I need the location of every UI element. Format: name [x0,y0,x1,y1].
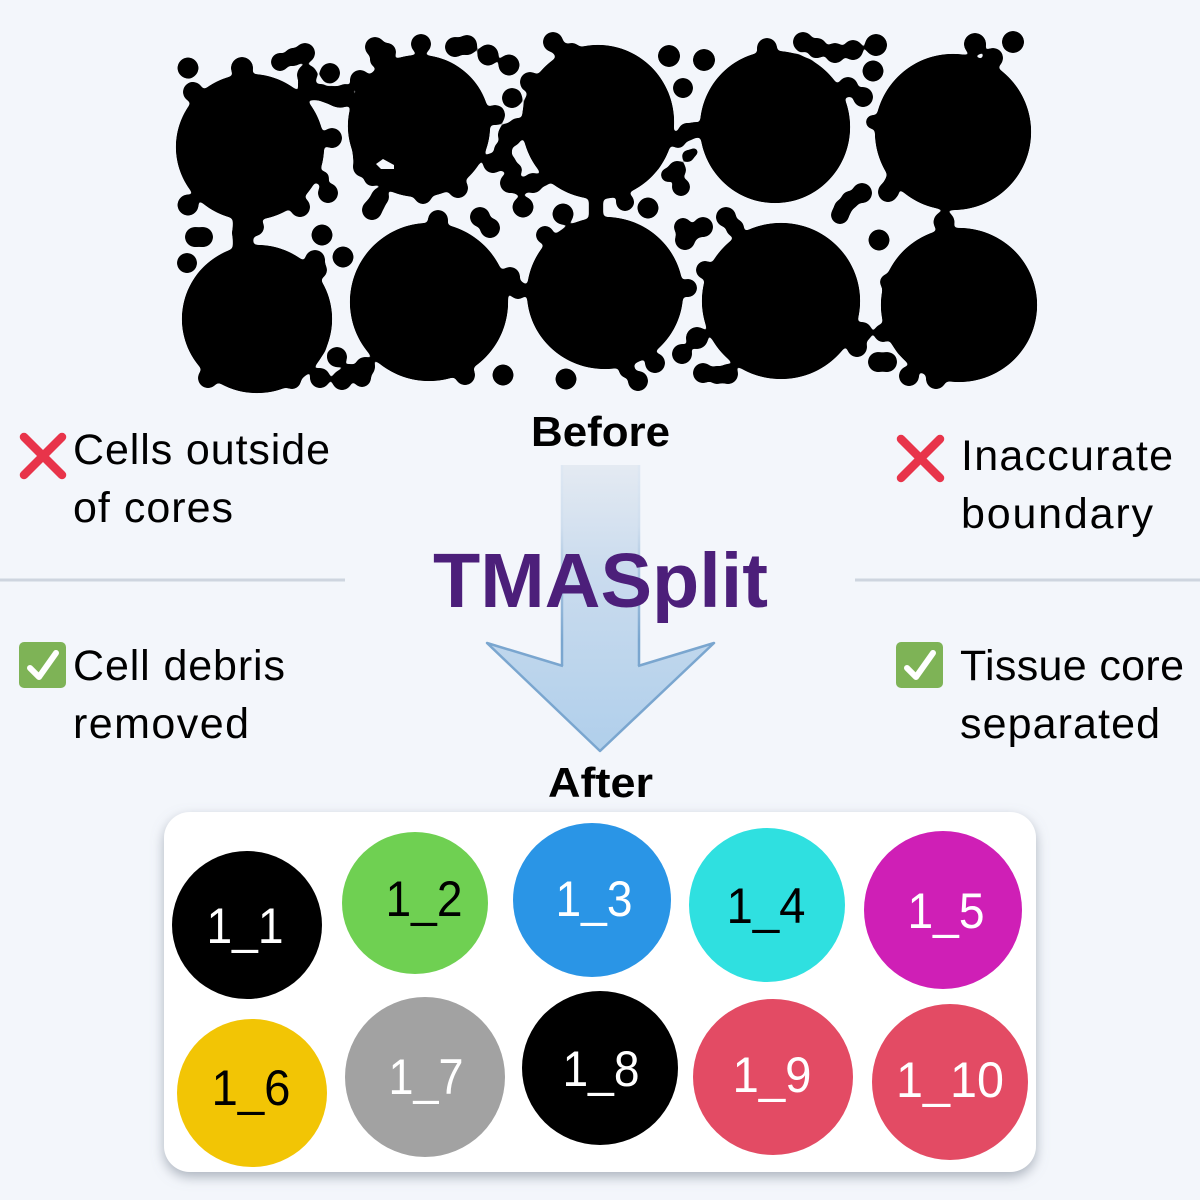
core 1_1: 1_1 [206,898,284,954]
divider: right [855,578,1200,582]
core 1_8: 1_8 [562,1041,640,1097]
heading: Before: Before [531,408,670,455]
core 1_10: 1_10 [896,1052,1004,1108]
core 1_5: 1_5 [908,883,984,939]
text: tissue core separated: separated [960,700,1160,748]
hole in mask [376,159,394,169]
core 1_10 [872,1004,1028,1160]
text: inaccurate boundary: Inaccurate [961,432,1173,480]
core 1_3 [513,823,671,977]
panel: after segmented cores [164,812,1036,1172]
core 1_2: 1_2 [386,871,462,927]
icon: green check left [19,642,66,688]
text: tissue core separated: Tissue core [960,642,1184,690]
title: TMASplit: TMASplit [433,538,768,624]
chart: before segmentation mask with merged tissue cores and debris [176,31,1037,393]
core 1_4 [689,828,845,982]
text: cell debris removed: removed [73,700,249,748]
core 1_6 [177,1019,327,1167]
core 1_6: 1_6 [212,1060,290,1116]
text: inaccurate boundary [961,432,1173,538]
core 1_1 [172,851,322,999]
tissue cores, bridges and debris dots [176,31,1037,393]
core 1_9: 1_9 [732,1047,812,1103]
text: cells outside of cores [73,426,330,532]
text: cells outside of cores: of cores [73,484,233,532]
core 1_4: 1_4 [726,878,806,934]
text: cell debris removed: Cell debris [73,642,285,690]
icon: red cross right [901,439,940,478]
icon: green check right [896,642,943,688]
core 1_8 [522,991,678,1145]
text: cell debris removed [73,642,285,748]
core 1_7: 1_7 [388,1049,464,1105]
core 1_2 [342,832,488,974]
heading: After: After [548,759,653,806]
text: inaccurate boundary: boundary [961,490,1154,538]
core 1_9 [693,999,853,1155]
icon: red cross left [24,437,62,475]
text: tissue core separated [960,642,1184,748]
text: cells outside of cores: Cells outside [73,426,330,474]
arrow: before to after [487,465,714,751]
core 1_3: 1_3 [556,871,632,927]
divider: left [0,578,345,582]
core 1_7 [345,997,505,1157]
core 1_5 [864,831,1022,989]
